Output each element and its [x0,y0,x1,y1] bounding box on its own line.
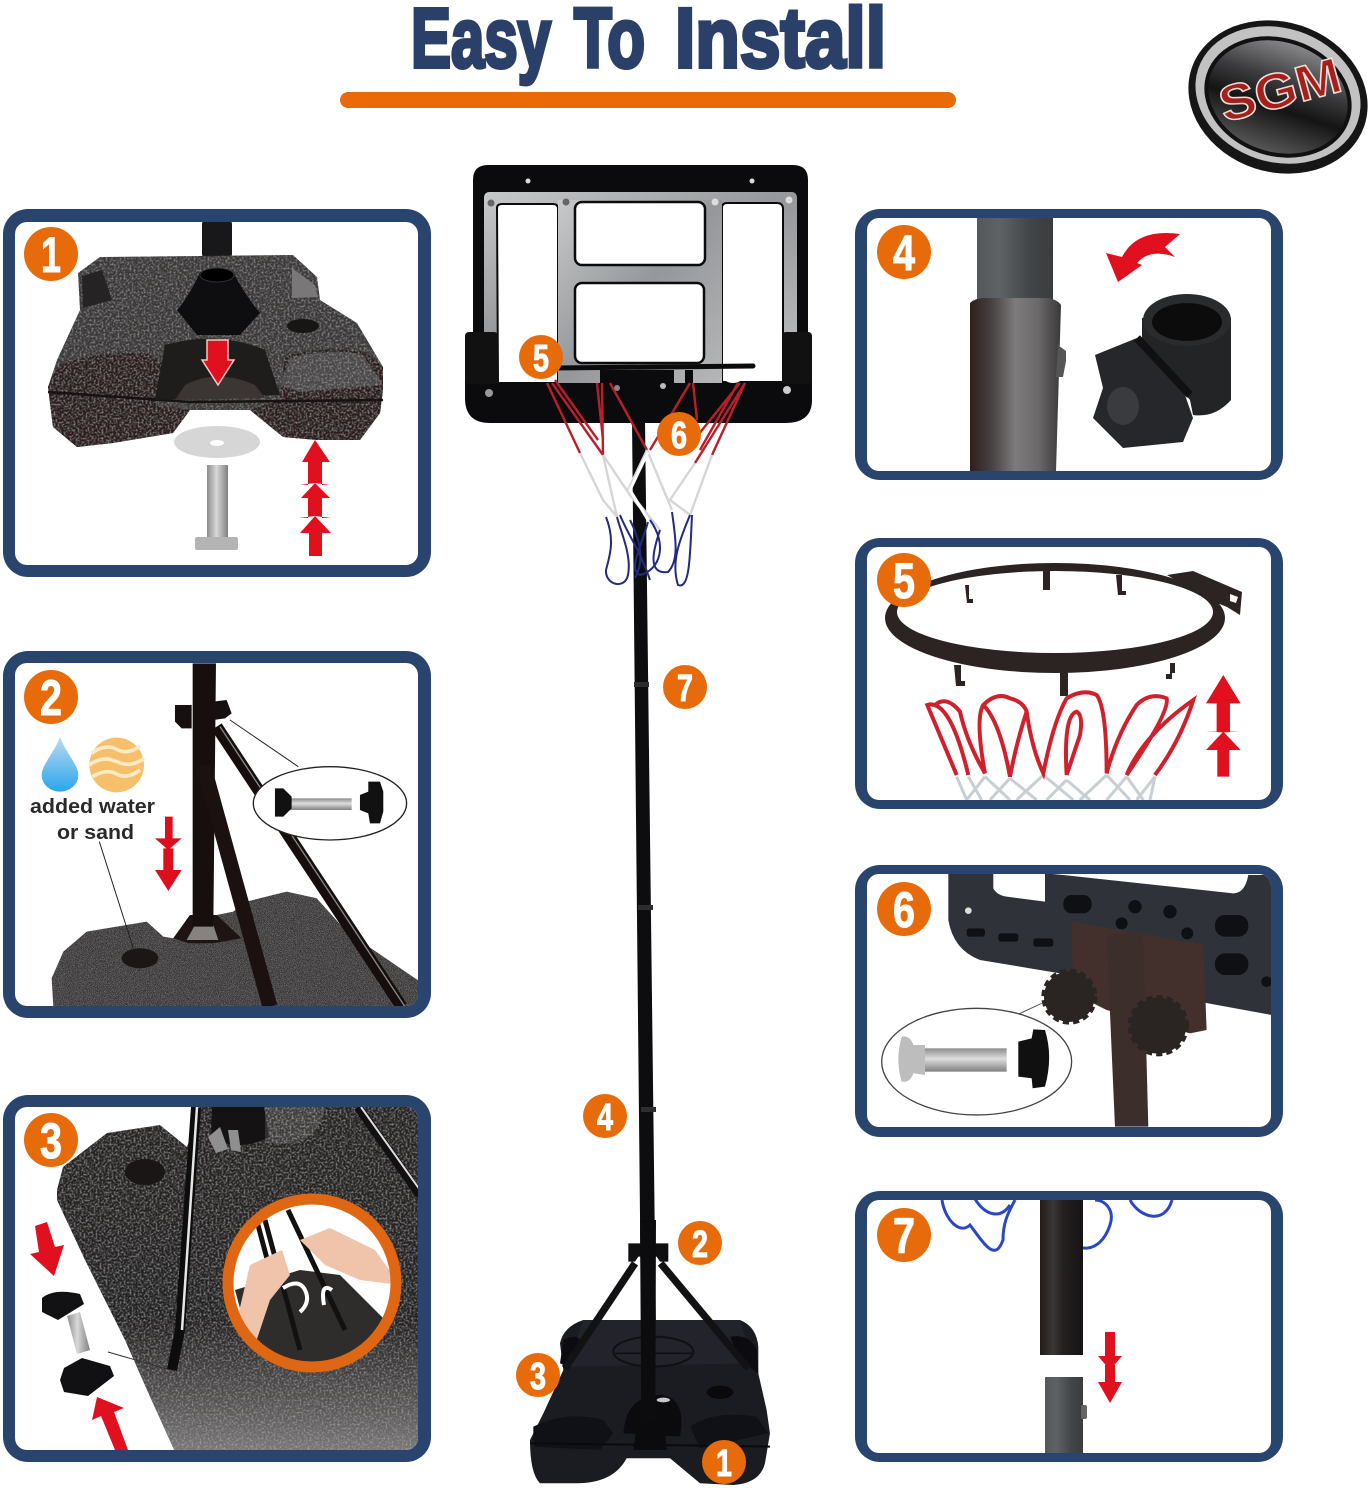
filler hole [122,948,158,968]
panel frame [3,1095,431,1462]
panel: step 3 [3,1095,431,1462]
panel: step 2 [3,651,431,1018]
badge 3 [24,1113,78,1169]
badge: pole 7 [663,665,707,710]
icon: sand [89,738,144,792]
pole joints [634,682,656,1112]
callout: bolt detail [253,767,407,840]
badge: pole 2 [678,1221,722,1266]
badge: pole 6: 6 [671,415,687,457]
base [530,1220,770,1485]
badge 1 [24,227,78,283]
curved arrow [1106,233,1180,282]
pin [1056,345,1066,377]
badge: pole 2: 2 [692,1224,708,1266]
badge: pole 4: 4 [597,1097,613,1139]
badge: pole 5: 5 [533,338,549,380]
pin [1081,1405,1087,1419]
arrows up [1206,675,1241,777]
net [927,675,1241,800]
knob right [1130,998,1186,1054]
lower pole [1045,1377,1083,1457]
badge 7 [877,1208,931,1264]
nut knob [60,1358,114,1396]
base front lobes [48,353,190,447]
filler cap [125,1159,165,1185]
arrow down [202,340,234,385]
main product: basketball hoop stand [465,165,812,1485]
collar knobs [175,700,232,728]
backboard back [948,873,1272,1015]
icon: SGM logo: SGM [1213,47,1347,133]
arrows down [1098,1332,1122,1403]
pole [632,420,657,1415]
handle slots [82,270,112,308]
stand pole [202,222,232,256]
blue net [942,1199,1172,1250]
rim ring [885,563,1242,696]
upper pole [1040,1199,1083,1355]
strut left [172,1107,196,1370]
badge 6: 6 [893,882,915,938]
tripod struts [565,1263,748,1368]
callout: bolt [882,1003,1072,1115]
callout lines [99,720,298,948]
badge: pole 3 [516,1353,560,1398]
struts [214,778,277,1006]
leader line [108,1352,170,1370]
net: white section [957,775,1155,800]
rim [555,366,753,368]
badge: pole 6 [657,412,701,457]
mount plate [1072,922,1207,1033]
badge 4 [877,225,931,281]
net: red strands [547,380,745,463]
icon: SGM logo [1168,0,1370,196]
panel: step 1 [3,209,431,577]
knob with screw [42,1292,90,1354]
net: blue strands [606,512,692,585]
panel frame [855,538,1283,809]
title [411,0,886,85]
badge: pole 4 [583,1094,627,1139]
badge 2 [24,670,78,726]
title underline bar [340,92,956,108]
label: added water or sand: added water [30,796,155,818]
water base close-up [57,1107,420,1452]
badge: pole 5 [519,335,563,380]
back holes [967,895,1272,987]
badge 5 [877,553,931,609]
arrow to knob [30,1222,64,1276]
badge 2: 2 [40,670,62,726]
panel: step 7 [855,1191,1283,1462]
lens: hands detail [228,1199,400,1375]
pole [1107,932,1148,1127]
icon: water drop [42,737,78,792]
badge 1: 1 [41,227,61,283]
badge: pole 1 [702,1440,746,1485]
badge 5: 5 [893,553,915,609]
badge 4: 4 [893,225,915,281]
badge 3: 3 [40,1113,62,1169]
badge: pole 7: 7 [677,668,693,710]
arrow down [155,817,182,891]
panel: step 6 [855,865,1283,1137]
socket [211,1107,269,1145]
cone socket [173,915,242,943]
knob clamp [1093,294,1231,448]
badge: pole 1: 1 [716,1443,732,1485]
base recess [155,339,280,400]
badge 7: 7 [893,1208,915,1264]
cone socket [177,272,260,335]
panel frame [3,651,431,1018]
strut right [358,1107,420,1195]
panel: step 4 [855,209,1283,480]
panel: step 2: or sand [57,822,134,844]
upper pole [977,218,1053,302]
rim hooks [954,568,1175,696]
panel: step 5 [855,538,1283,809]
panel frame [855,209,1283,480]
arrows up [300,440,330,485]
washer [174,426,260,458]
water base [52,892,420,1007]
badge 6 [877,882,931,938]
panel frame [855,865,1283,1137]
panel frame [855,1191,1283,1462]
net: white strands [580,450,712,530]
arrow up [92,1397,128,1450]
pole [193,663,216,927]
water base [48,255,383,447]
knob left [1044,971,1095,1022]
backboard [465,165,812,423]
badge: pole 3: 3 [530,1356,546,1398]
panel frame [3,209,431,577]
net: red loops [927,692,1193,777]
rim bracket [1167,571,1242,615]
lower pole [970,298,1061,471]
tripod collar [628,1243,668,1262]
bolt [207,465,228,539]
